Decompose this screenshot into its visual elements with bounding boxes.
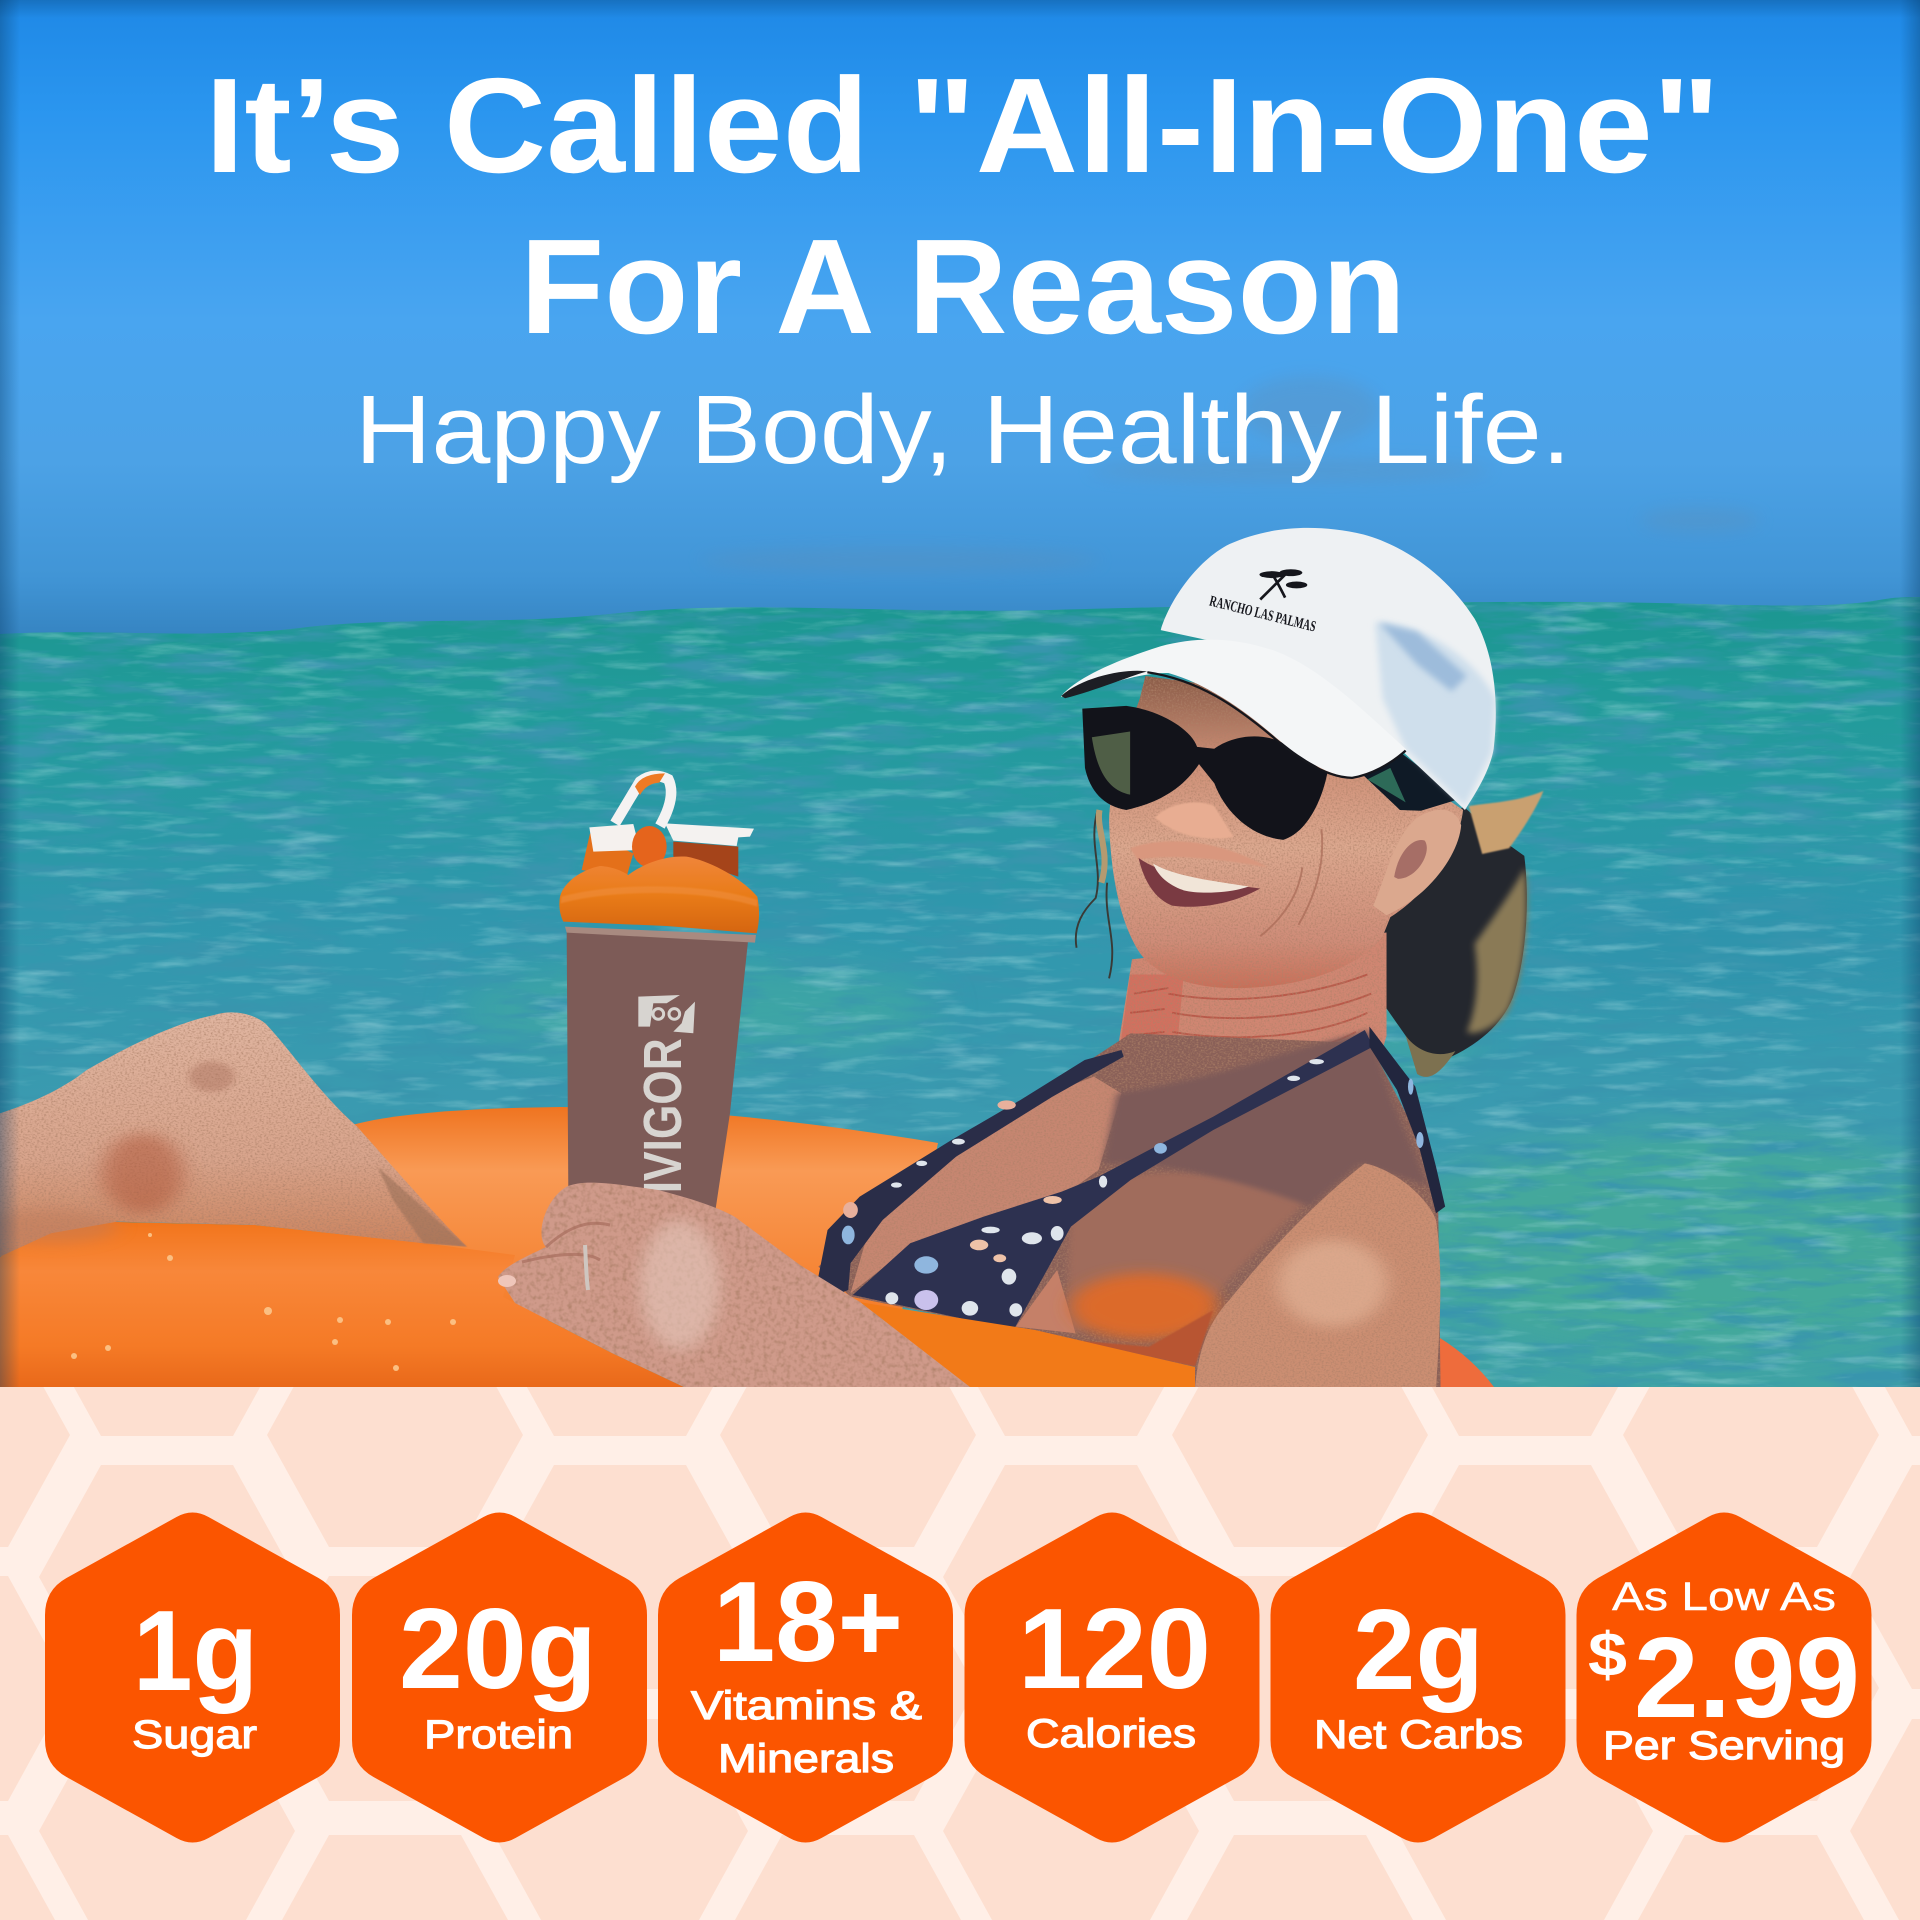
subheading: Happy Body, Healthy Life. [355,375,1571,484]
sea [0,590,1920,1390]
arm [1195,1163,1440,1390]
inflatable tube, back section [352,1107,1494,1387]
sky [0,0,1920,640]
smile [1139,858,1260,907]
title [205,50,1720,484]
head [1061,528,1496,988]
photo vignette [0,0,1920,1387]
badge: 120 calories: Calories [1026,1712,1196,1756]
badge: 18+ vitamins and minerals: 18+ [713,1559,903,1686]
distant clouds [700,376,1760,572]
badge: 18+ vitamins and minerals [658,1512,953,1842]
badge: 1g sugar [45,1512,340,1842]
badge: price per serving: Per Serving [1603,1724,1845,1768]
neck [1119,932,1387,1062]
cap logo: RANCHO LAS PALMAS [1208,593,1318,636]
torso [818,1030,1441,1390]
bottle body [567,930,748,1213]
badge: price per serving: 2.99 [1634,1615,1860,1742]
badge: 1g sugar: 1g [133,1588,258,1715]
ear [1373,810,1461,915]
cap logo [1208,569,1318,636]
badge: 2g net carbs [1270,1512,1566,1842]
leg with knee [0,1012,467,1257]
photo: woman floating in the sea with shaker bottle [0,0,1920,1390]
headline line 1: It’s Called "All-In-One" [205,50,1720,201]
inflatable tube, front section [0,1222,1195,1387]
hand and forearm holding the bottle [498,1183,970,1387]
badge: 18+ vitamins and minerals: Minerals [718,1737,894,1781]
badge: 1g sugar: Sugar [132,1713,257,1757]
headline line 2: For A Reason [520,211,1406,362]
badge: 120 calories: 120 [1018,1586,1211,1713]
shaker bottle with VIGOR8 logo [559,773,759,1213]
cap [1061,528,1496,810]
badge: 18+ vitamins and minerals: Vitamins & [691,1684,922,1728]
hair [1076,791,1543,1077]
badge: 20g protein: 20g [399,1586,597,1713]
badge: price per serving [1576,1512,1872,1842]
badge: 2g net carbs: Net Carbs [1314,1713,1523,1757]
badge: 20g protein [352,1512,647,1842]
badge: 2g net carbs: 2g [1353,1587,1484,1714]
face [1109,676,1463,988]
badge: price per serving: As Low As [1612,1575,1836,1619]
nose and cheek highlight [1155,802,1233,839]
badge: 20g protein: Protein [424,1713,573,1757]
honeycomb background panel [0,1212,1920,1920]
logo: IVIGOR [634,1038,693,1193]
bottle cap mechanism [673,842,738,877]
bikini [818,1027,1445,1330]
woman [818,528,1543,1390]
bottle lid [559,856,759,933]
sunglasses [1082,706,1461,840]
badge: price per serving: $ [1588,1621,1627,1690]
badge: 120 calories [964,1512,1260,1842]
